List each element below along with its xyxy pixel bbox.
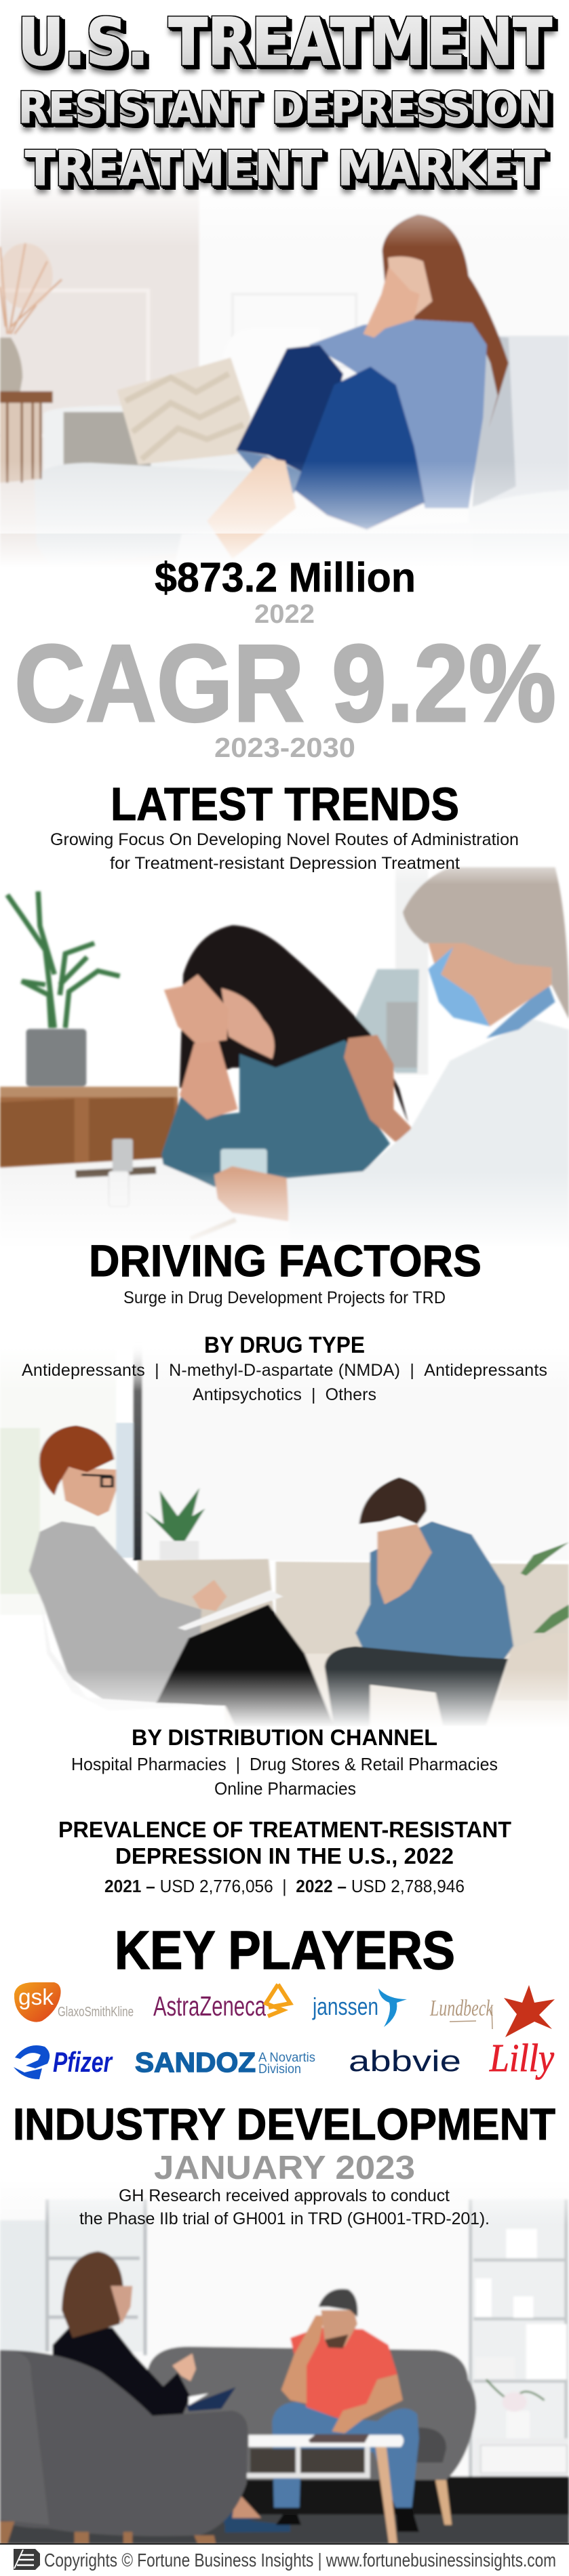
driving factors description: Surge in Drug Development Projects for TRD	[123, 1288, 446, 1307]
heading: latest trends: LATEST TRENDS	[111, 778, 459, 830]
logo: Pfizer	[14, 2045, 113, 2079]
development date: JANUARY 2023	[154, 2150, 415, 2186]
icon: Fortune Business Insights logo	[14, 2549, 40, 2570]
drug type list: Antidepressants | N-methyl-D-aspartate (NMDA) | Antidepressants	[22, 1361, 547, 1380]
latest trends description: Growing Focus On Developing Novel Routes of Administration	[50, 830, 519, 849]
latest trends description: for Treatment-resistant Depression Treatment	[110, 854, 460, 873]
logos: key players	[14, 1982, 555, 2080]
distribution channel list: Hospital Pharmacies | Drug Stores & Retail Pharmacies	[71, 1754, 498, 1774]
photo: woman on sofa covering her face	[0, 171, 569, 582]
logo: AstraZeneca: AstraZeneca	[153, 1990, 266, 2022]
logo: GSK: GlaxoSmithKline	[58, 2005, 134, 2020]
title	[18, 5, 552, 197]
logo: Sandoz: A Novartis	[258, 2051, 315, 2065]
logo: GSK: gsk	[18, 1984, 54, 2009]
footer	[14, 2549, 556, 2571]
latest trends description	[50, 830, 519, 873]
development description: the Phase IIb trial of GH001 in TRD (GH001-TRD-201).	[79, 2209, 490, 2228]
logo: Lundbeck	[429, 1985, 555, 2037]
logo: Janssen	[312, 1988, 407, 2027]
prevalence heading	[58, 1817, 511, 1868]
drug type list: Antipsychotics | Others	[193, 1385, 376, 1404]
drug type list	[22, 1361, 547, 1404]
logo: Pfizer: Pfizer	[53, 2046, 113, 2078]
distribution channel list: Online Pharmacies	[214, 1778, 356, 1799]
heading: key players: KEY PLAYERS	[115, 1920, 455, 1980]
heading: driving factors: DRIVING FACTORS	[89, 1235, 482, 1286]
prevalence heading: DEPRESSION IN THE U.S., 2022	[115, 1843, 454, 1868]
development description	[79, 2186, 490, 2228]
photo: therapy session in living room	[0, 2180, 569, 2576]
distribution channel list	[71, 1754, 498, 1799]
logo: Lilly: Lilly	[489, 2036, 554, 2080]
logo: Sandoz	[135, 2047, 315, 2078]
logo: Janssen: janssen	[312, 1992, 378, 2020]
logo: AbbVie: abbvie	[349, 2045, 461, 2078]
photo: therapist with male patient on sofa	[0, 1343, 569, 1788]
base year: 2022	[254, 600, 315, 629]
logo: GSK	[14, 1982, 134, 2022]
title: TREATMENT MARKET	[25, 141, 545, 197]
prevalence heading: PREVALENCE OF TREATMENT-RESISTANT	[58, 1817, 511, 1842]
logo: Sandoz: SANDOZ	[135, 2047, 256, 2078]
forecast period: 2023-2030	[214, 732, 355, 763]
heading: by distribution channel: BY DISTRIBUTION CHANNEL	[132, 1725, 437, 1750]
prevalence values: 2021 – USD 2,776,056 | 2022 – USD 2,788,946	[104, 1876, 465, 1896]
market size value: $873.2 Million	[155, 554, 416, 600]
logo: Sandoz: Division	[258, 2062, 301, 2077]
heading: by drug type: BY DRUG TYPE	[204, 1332, 365, 1358]
logo: Lundbeck: Lundbeck	[429, 1996, 494, 2021]
photo: doctor comforting patient	[0, 860, 569, 1317]
development description: GH Research received approvals to conduct	[119, 2186, 450, 2205]
